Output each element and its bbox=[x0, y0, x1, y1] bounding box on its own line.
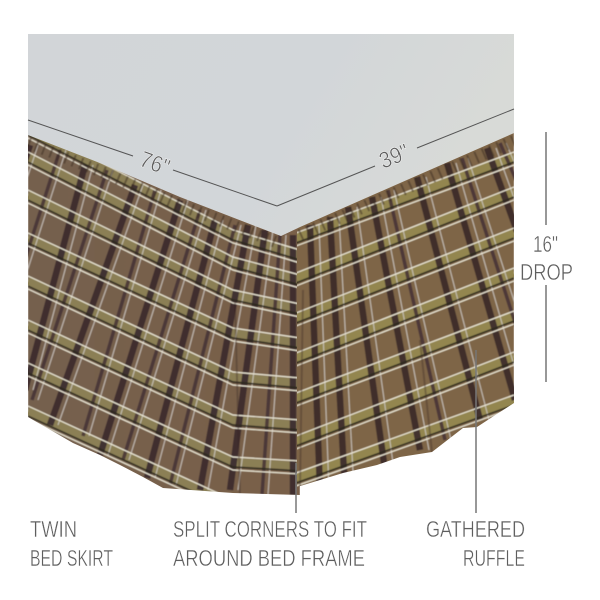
callout: gathered ruffle: RUFFLE bbox=[463, 545, 525, 571]
drop dimension: 16 inch drop: 16" bbox=[533, 231, 558, 257]
callout: gathered ruffle: GATHERED bbox=[426, 516, 525, 542]
callout: gathered ruffle bbox=[426, 350, 525, 571]
label: twin bed skirt: TWIN bbox=[30, 516, 77, 542]
label: twin bed skirt: BED SKIRT bbox=[30, 545, 113, 571]
width dimension line: 39 inches bbox=[277, 109, 514, 206]
callout: split corners bbox=[173, 463, 367, 571]
plaid skirt: left panel bbox=[28, 135, 300, 495]
width dimension line: 39 inches: 39" bbox=[375, 138, 413, 174]
callout: split corners: SPLIT CORNERS TO FIT bbox=[173, 516, 367, 542]
width dimension line: 76 inches bbox=[28, 120, 277, 206]
callout: split corners: AROUND BED FRAME bbox=[173, 545, 365, 571]
width dimension line: 76 inches: 76" bbox=[136, 146, 174, 180]
drop dimension: 16 inch drop bbox=[520, 132, 573, 382]
drop dimension: 16 inch drop: DROP bbox=[520, 259, 573, 285]
label: twin bed skirt bbox=[30, 516, 113, 571]
plaid skirt: right panel bbox=[297, 133, 514, 487]
bed top mattress bbox=[28, 34, 514, 236]
